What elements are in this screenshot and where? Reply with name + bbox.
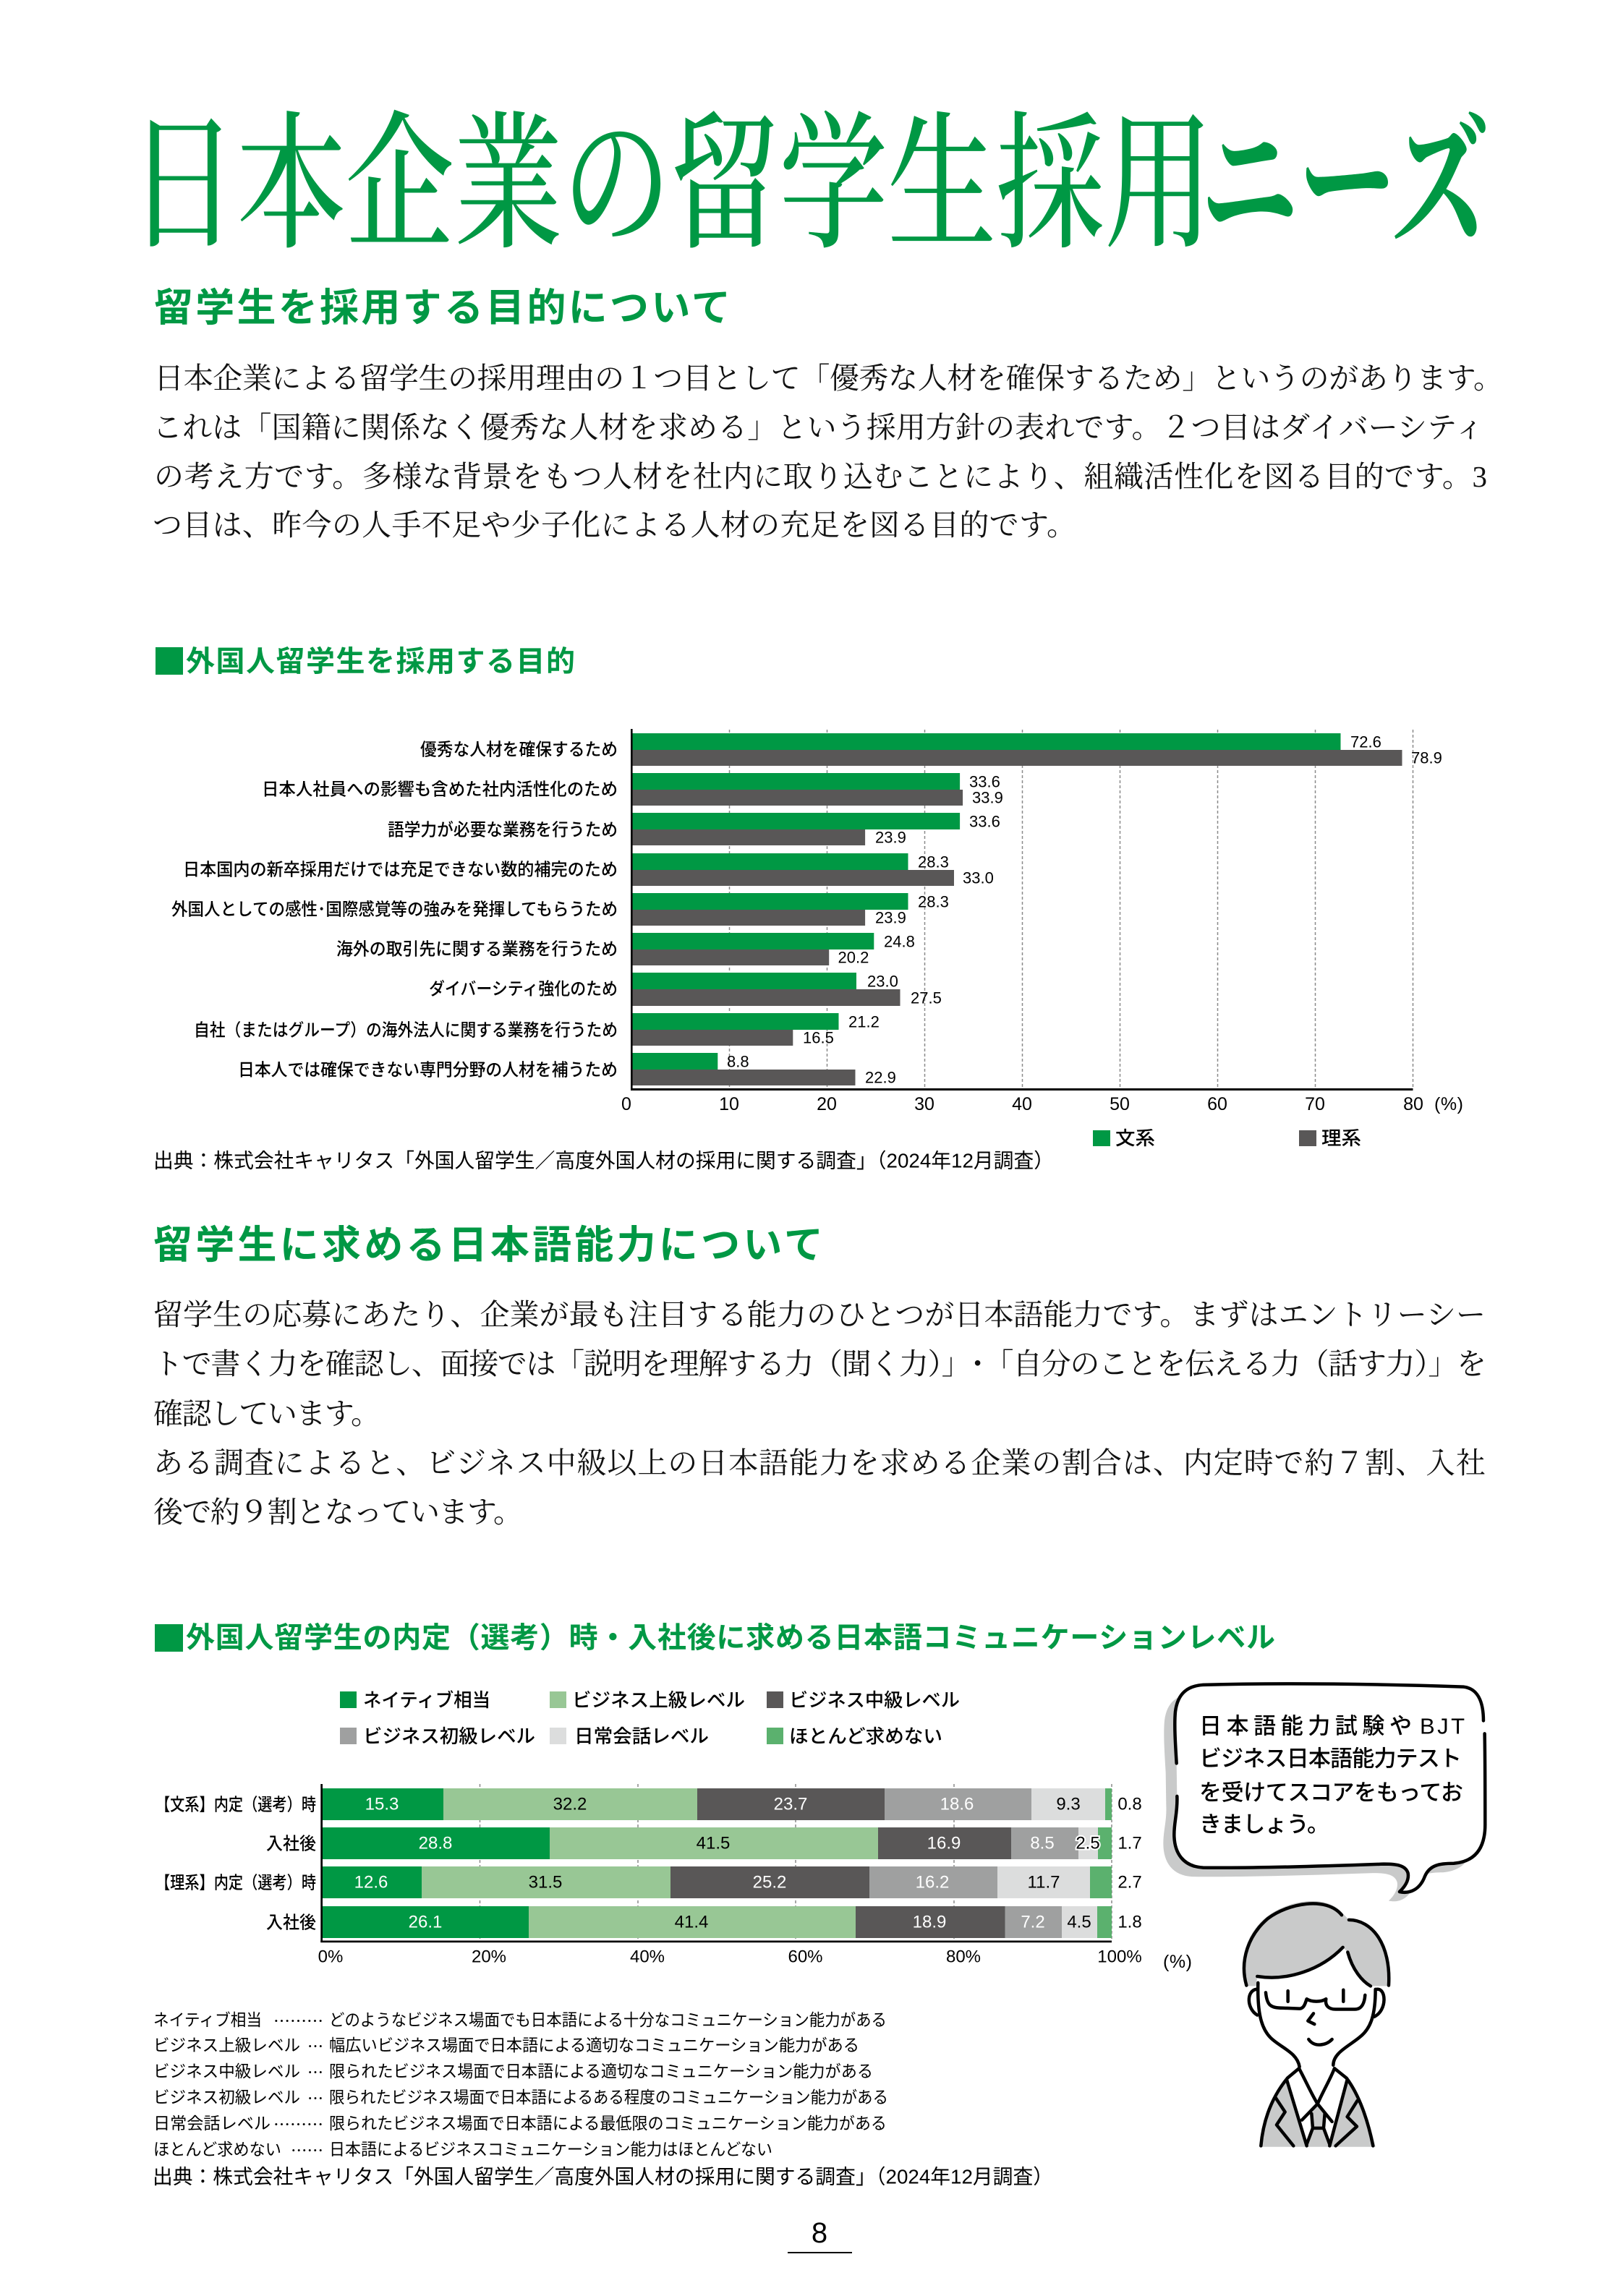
stacked row 1: 32.2 — [553, 1795, 587, 1814]
stacked row 3: 25.2 — [753, 1873, 786, 1892]
stacked row 2: 41.5 — [697, 1834, 730, 1853]
bar row 7: 27.5 — [911, 989, 942, 1007]
stacked bar chart: Japanese level — [156, 1784, 1192, 1972]
bar row 6: 20.2 — [838, 949, 869, 966]
stacked row 3 — [156, 1866, 1142, 1898]
unit label: (%) — [1163, 1952, 1192, 1972]
definitions list: 日常会話レベル — [153, 2114, 271, 2133]
stacked row 1: 0.8 — [1117, 1795, 1142, 1814]
definitions list — [153, 2007, 888, 2161]
definitions list: … — [307, 2085, 323, 2109]
definitions list: ……… — [273, 2007, 323, 2032]
bar row 6 — [336, 933, 915, 966]
x axis labels: 80 — [1403, 1094, 1423, 1114]
bar row 7: 23.0 — [867, 972, 898, 991]
text block: purpose of hiring: これは「国籍に関係なく優秀な人材を求める」という採用方針の表れです。２つ目はダイバーシティ — [153, 411, 1484, 444]
x axis labels: 50 — [1110, 1094, 1130, 1114]
legend: 文系 — [1115, 1127, 1155, 1149]
stacked row 1: 9.3 — [1056, 1795, 1081, 1814]
text block: Japanese ability: 後で約９割となっています。 — [153, 1495, 523, 1529]
stacked row 4 — [266, 1906, 1142, 1938]
stacked row 2 — [266, 1827, 1142, 1859]
x axis labels: 0% — [318, 1947, 343, 1967]
legend: levels: ほとんど求めない — [789, 1725, 942, 1747]
stacked row 3: 2.7 — [1117, 1873, 1142, 1892]
text block: purpose of hiring — [153, 362, 1503, 542]
definitions list: 限られたビジネス場面で日本語による最低限のコミュニケーション能力がある — [329, 2114, 887, 2133]
x axis labels — [621, 1094, 1463, 1114]
x axis labels — [318, 1947, 1142, 1967]
subheading: chart 1: 外国人留学生を採用する目的 — [186, 646, 575, 678]
bar row 5: 28.3 — [918, 892, 949, 911]
definitions list: 限られたビジネス場面で日本語によるある程度のコミュニケーション能力がある — [329, 2088, 888, 2107]
stacked row 4: 18.9 — [913, 1912, 946, 1932]
text block: purpose of hiring: の考え方です。多様な背景をもつ人材を社内に取り込むことにより、組織活性化を図る目的です。3 — [154, 460, 1487, 493]
bar row 7: ダイバーシティ強化のため — [429, 979, 618, 999]
bar row 4: 33.0 — [963, 869, 994, 887]
x axis labels: 80% — [946, 1947, 981, 1967]
stacked row 1: 【文系】内定（選考）時 — [156, 1795, 316, 1815]
bar row 3 — [388, 813, 1000, 846]
x axis labels: 100% — [1097, 1947, 1142, 1967]
bar row 2: 33.9 — [972, 788, 1003, 807]
definitions list: ……… — [273, 2111, 323, 2135]
definitions list: … — [307, 2059, 323, 2083]
stacked row 4: 4.5 — [1067, 1912, 1091, 1932]
bar row 2: 33.6 — [969, 772, 1000, 791]
stacked row 2: 16.9 — [927, 1834, 961, 1853]
bar row 1: 72.6 — [1350, 733, 1381, 751]
legend: levels — [340, 1689, 960, 1747]
x axis labels: 60 — [1207, 1094, 1227, 1114]
stacked row 2: 1.7 — [1117, 1834, 1142, 1853]
bar row 8: 自社（またはグループ）の海外法人に関する業務を行うため — [194, 1021, 618, 1040]
text block: Japanese ability: 留学生の応募にあたり、企業が最も注目する能力のひとつが日本語能力です。まずはエントリーシー — [153, 1298, 1486, 1331]
definitions list: ビジネス中級レベル — [153, 2062, 300, 2081]
x axis labels: 60% — [788, 1947, 823, 1967]
stacked row 4: 1.8 — [1117, 1912, 1142, 1932]
bar row 6: 24.8 — [884, 933, 915, 950]
bar row 3: 23.9 — [875, 829, 906, 846]
text block: purpose of hiring: つ目は、昨今の人手不足や少子化による人材の充足を図る目的です。 — [153, 508, 1076, 542]
stacked row 2: 入社後 — [266, 1834, 316, 1854]
stacked row 1: 15.3 — [365, 1795, 399, 1814]
bar row 4: 日本国内の新卒採用だけでは充足できない数的補完のため — [183, 861, 618, 879]
x axis labels: 70 — [1305, 1094, 1325, 1114]
definitions list: ネイティブ相当 — [153, 2010, 262, 2029]
legend: levels: ビジネス上級レベル — [572, 1689, 745, 1711]
heading: purpose of hiring: 留学生を採用する目的について — [154, 286, 731, 330]
x axis labels: 40 — [1012, 1094, 1032, 1114]
stacked row 2: 2.5 — [1076, 1834, 1100, 1853]
definitions list: 限られたビジネス場面で日本語による適切なコミュニケーション能力がある — [329, 2062, 873, 2081]
bar row 1: 優秀な人材を確保するため — [420, 741, 618, 759]
legend: levels: ビジネス中級レベル — [789, 1689, 960, 1711]
definitions list: ビジネス上級レベル — [153, 2036, 300, 2054]
source 1: 出典：株式会社キャリタス「外国人留学生／高度外国人材の採用に関する調査」（2024年12月調査） — [153, 1150, 1054, 1172]
text block: purpose of hiring: 日本企業による留学生の採用理由の１つ目として「優秀な人材を確保するため」というのがあります。 — [154, 362, 1503, 395]
stacked row 1: 18.6 — [940, 1795, 974, 1814]
bar row 4: 28.3 — [918, 853, 949, 871]
text block: Japanese ability: ある調査によると、ビジネス中級以上の日本語能力を求める企業の割合は、内定時で約７割、入社 — [153, 1446, 1486, 1480]
bar row 6: 海外の取引先に関する業務を行うため — [336, 940, 618, 959]
x axis labels: 40% — [630, 1947, 665, 1967]
bar row 5: 外国人としての感性･国際感覚等の強みを発揮してもらうため — [171, 900, 618, 920]
bar row 9: 8.8 — [727, 1053, 749, 1070]
bar row 9: 日本人では確保できない専門分野の人材を補うため — [238, 1060, 618, 1080]
bubble text: ビジネス日本語能力テスト — [1199, 1746, 1462, 1772]
stacked row 3: 【理系】内定（選考）時 — [156, 1873, 316, 1893]
stacked row 4: 41.4 — [675, 1912, 708, 1932]
definitions list: ほとんど求めない — [153, 2140, 281, 2159]
bar row 9 — [238, 1053, 896, 1086]
title: 日本企業の留学生採用 — [129, 104, 1213, 268]
bar row 3: 33.6 — [969, 813, 1000, 830]
text block: Japanese ability: トで書く力を確認し、面接では「説明を理解する力（聞く力）」･「自分のことを伝える力（話す力）」を — [153, 1347, 1486, 1380]
bar row 3: 語学力が必要な業務を行うため — [388, 820, 618, 840]
bubble text: 日本語能力試験や — [1199, 1714, 1412, 1738]
legend — [1093, 1127, 1361, 1149]
bubble text: BJT — [1420, 1714, 1465, 1738]
bubble text: きましょう。 — [1199, 1812, 1329, 1837]
bar row 8: 21.2 — [848, 1012, 880, 1031]
x axis labels: 20 — [817, 1094, 837, 1114]
definitions list: … — [307, 2033, 323, 2057]
stacked row 2: 8.5 — [1030, 1834, 1055, 1853]
speech bubble — [1163, 1683, 1485, 1901]
stacked row 1 — [156, 1788, 1142, 1820]
x axis labels: 20% — [472, 1947, 506, 1967]
source 2: 出典：株式会社キャリタス「外国人留学生／高度外国人材の採用に関する調査」（2024年12月調査） — [153, 2165, 1053, 2188]
bubble text — [1199, 1714, 1465, 1837]
x axis labels: 30 — [914, 1094, 934, 1114]
x axis labels: 0 — [621, 1094, 631, 1114]
bubble text: を受けてスコアをもってお — [1199, 1780, 1463, 1805]
definitions list: 幅広いビジネス場面で日本語による適切なコミュニケーション能力がある — [329, 2036, 859, 2054]
bar row 1 — [420, 733, 1442, 767]
stacked row 2: 28.8 — [419, 1834, 452, 1853]
bar row 1: 78.9 — [1411, 749, 1442, 767]
definitions list: 日本語によるビジネスコミュニケーション能力はほとんどない — [329, 2140, 772, 2159]
stacked row 4: 26.1 — [409, 1912, 442, 1932]
page number — [788, 2217, 852, 2253]
stacked row 3: 31.5 — [529, 1873, 562, 1892]
definitions list: ビジネス初級レベル — [153, 2088, 300, 2107]
bar row 8: 16.5 — [803, 1028, 834, 1047]
bar row 9: 22.9 — [865, 1069, 896, 1086]
subheading: chart 2: 外国人留学生の内定（選考）時・入社後に求める日本語コミュニケーションレベル — [186, 1622, 1275, 1654]
bar chart: purpose of hiring foreign students — [171, 729, 1463, 1149]
bar row 5 — [171, 892, 949, 927]
stacked row 3: 11.7 — [1028, 1873, 1060, 1892]
legend: 理系 — [1321, 1127, 1361, 1149]
bar row 8 — [194, 1012, 880, 1047]
legend: levels: ビジネス初級レベル — [363, 1725, 535, 1747]
bar row 2 — [262, 772, 1003, 807]
bar row 5: 23.9 — [875, 908, 906, 927]
definitions list: どのようなビジネス場面でも日本語による十分なコミュニケーション能力がある — [329, 2010, 887, 2029]
page number: 8 — [812, 2217, 827, 2249]
bar row 2: 日本人社員への影響も含めた社内活性化のため — [262, 780, 618, 800]
bar row 4 — [183, 853, 994, 887]
x axis labels: 10 — [719, 1094, 739, 1114]
stacked row 4: 入社後 — [266, 1913, 316, 1932]
stacked row 4: 7.2 — [1021, 1912, 1045, 1932]
legend: levels: ネイティブ相当 — [363, 1689, 490, 1711]
stacked row 3: 12.6 — [354, 1873, 388, 1892]
heading: Japanese ability: 留学生に求める日本語能力について — [153, 1224, 823, 1267]
bar row 7 — [429, 972, 942, 1007]
text block: Japanese ability: 確認しています。 — [153, 1397, 380, 1430]
text block: Japanese ability — [153, 1298, 1486, 1529]
x axis labels: (%) — [1434, 1094, 1463, 1114]
stacked row 3: 16.2 — [916, 1873, 949, 1892]
legend: levels: 日常会話レベル — [574, 1725, 709, 1747]
illustration: man with glasses — [1243, 1901, 1389, 2147]
stacked row 1: 23.7 — [774, 1795, 807, 1814]
definitions list: …… — [291, 2137, 323, 2161]
